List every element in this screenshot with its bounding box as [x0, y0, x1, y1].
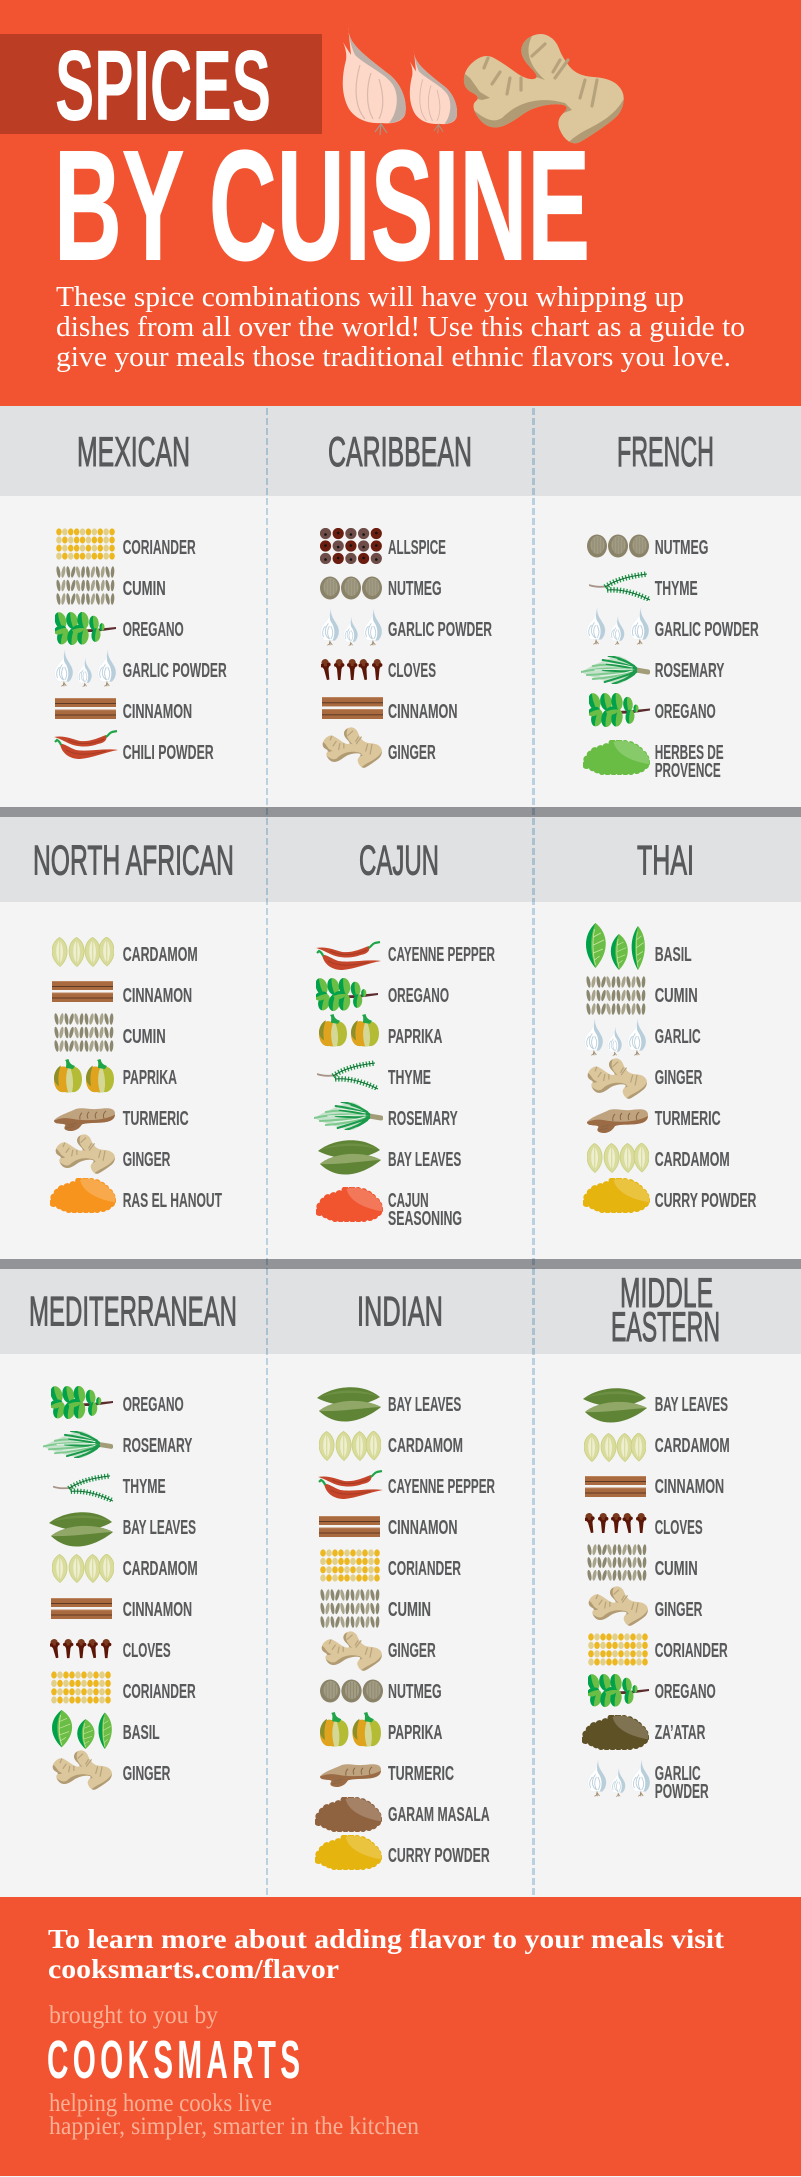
item: oregano [48, 1385, 184, 1420]
item: cardamom [584, 1433, 730, 1462]
item: cloves [319, 658, 436, 682]
item: cumin: CUMIN [655, 1558, 698, 1580]
item: cumin: CUMIN [123, 578, 166, 600]
item: nutmeg: NUTMEG [388, 578, 442, 600]
item: bay leaves [317, 1387, 461, 1422]
item: oregano: OREGANO [655, 1681, 716, 1703]
item: ginger [320, 1631, 436, 1673]
panel: indian [267, 1269, 534, 1870]
item: garlic powder: POWDER [655, 1781, 709, 1803]
item: bay leaves: BAY LEAVES [388, 1149, 461, 1171]
item: cayenne pepper [316, 942, 495, 970]
item: nutmeg [320, 576, 442, 600]
footer [0, 1897, 801, 2176]
item: ginger: GINGER [388, 1640, 436, 1662]
brought to you by: brought to you by [49, 2002, 218, 2029]
item: cumin [587, 1544, 698, 1581]
item: basil [52, 1710, 160, 1749]
item: cinnamon: CINNAMON [388, 1517, 458, 1539]
item: coriander: CORIANDER [655, 1640, 728, 1662]
item: ginger [54, 1134, 171, 1176]
item: turmeric [54, 1108, 189, 1131]
heading: mexican: MEXICAN [77, 428, 190, 475]
item: oregano: OREGANO [388, 985, 449, 1007]
item: curry powder: CURRY POWDER [388, 1845, 490, 1867]
call to action: To learn more about adding flavor to your meals visit [48, 1924, 724, 1954]
heading: caribbean [267, 406, 534, 496]
call to action [48, 1924, 724, 1984]
item: cinnamon [52, 981, 192, 1007]
call to action: cooksmarts.com/flavor [48, 1954, 339, 1984]
item: ginger [321, 727, 436, 770]
panel: mexican [0, 406, 267, 764]
title band [0, 34, 322, 134]
heading: indian [267, 1269, 534, 1354]
heading: thai: THAI [637, 836, 694, 884]
item: garlic powder [588, 1760, 709, 1803]
item: nutmeg [320, 1680, 442, 1703]
item: bay leaves: BAY LEAVES [388, 1394, 461, 1416]
item: cinnamon [585, 1476, 724, 1498]
item: herbes de provence: PROVENCE [655, 760, 721, 782]
item: bay leaves [49, 1512, 196, 1547]
item: cardamom: CARDAMOM [123, 1558, 198, 1580]
item: rosemary [43, 1431, 193, 1458]
heading: french: FRENCH [617, 428, 714, 475]
item: cinnamon: CINNAMON [655, 1476, 724, 1498]
heading: mediterranean [0, 1269, 267, 1354]
heading: french [534, 406, 801, 496]
item: coriander: CORIANDER [123, 1681, 196, 1703]
item: allspice [320, 528, 446, 564]
item: curry powder [582, 1177, 757, 1213]
heading: middle eastern [534, 1269, 801, 1354]
tagline: helping home cooks live [49, 2090, 272, 2117]
panel: mediterranean [0, 1269, 267, 1792]
item: cardamom: CARDAMOM [388, 1435, 463, 1457]
item: herbes de provence: HERBES DE [655, 742, 724, 764]
heading: caribbean: CARIBBEAN [328, 428, 472, 475]
item: cumin: CUMIN [655, 985, 698, 1007]
item: paprika: PAPRIKA [123, 1067, 177, 1089]
item: cinnamon [55, 698, 192, 723]
item: ginger [586, 1058, 703, 1101]
item: nutmeg: NUTMEG [388, 1681, 442, 1703]
item: basil: BASIL [655, 944, 692, 966]
panel: cajun [267, 817, 534, 1230]
item: curry powder [314, 1834, 490, 1870]
item: coriander: CORIANDER [123, 537, 196, 559]
item: turmeric: TURMERIC [123, 1108, 189, 1130]
item: paprika: PAPRIKA [388, 1026, 442, 1048]
item: cardamom [52, 1554, 198, 1583]
item: ginger [51, 1750, 171, 1792]
item: chili powder [54, 731, 214, 764]
heading: mediterranean: MEDITERRANEAN [29, 1288, 237, 1334]
item: nutmeg: NUTMEG [655, 537, 708, 559]
item: cumin: CUMIN [123, 1026, 166, 1048]
item: basil: BASIL [123, 1722, 160, 1744]
item: coriander: CORIANDER [388, 1558, 461, 1580]
intro text [56, 282, 745, 373]
item: cloves [48, 1638, 171, 1662]
item: rosemary [581, 656, 725, 684]
item: cardamom: CARDAMOM [123, 944, 198, 966]
item: coriander [56, 528, 196, 560]
item: ras el hanout [49, 1177, 222, 1213]
item: garlic powder: GARLIC POWDER [388, 619, 492, 641]
item: thyme [317, 1063, 431, 1089]
panel: caribbean [267, 406, 534, 770]
heading: north african: NORTH AFRICAN [33, 836, 234, 884]
icon: large garlic bulb [343, 27, 406, 135]
item: cumin [320, 1589, 431, 1628]
item: turmeric [320, 1763, 454, 1787]
item: coriander [51, 1671, 196, 1704]
item: thyme: THYME [655, 578, 698, 600]
tagline [49, 2090, 419, 2140]
item: cardamom [319, 1431, 463, 1460]
item: cardamom [52, 937, 198, 966]
item: cajun seasoning: SEASONING [388, 1208, 462, 1230]
item: ras el hanout: RAS EL HANOUT [123, 1190, 222, 1212]
item: bay leaves: BAY LEAVES [655, 1394, 728, 1416]
item: cloves: CLOVES [388, 660, 436, 682]
item: cinnamon: CINNAMON [123, 701, 192, 723]
item: oregano: OREGANO [123, 619, 184, 641]
item: ginger: GINGER [123, 1763, 171, 1785]
item: nutmeg [587, 534, 708, 559]
item: garlic powder [587, 608, 759, 645]
item: garlic powder: GARLIC [655, 1763, 701, 1785]
item: thyme: THYME [388, 1067, 431, 1089]
item: paprika [319, 1014, 442, 1048]
item: cloves: CLOVES [123, 1640, 171, 1662]
item: cloves: CLOVES [655, 1517, 703, 1539]
item: cumin [586, 976, 698, 1015]
item: cinnamon [51, 1598, 192, 1621]
item: cumin [54, 1013, 166, 1052]
item: thyme [589, 574, 698, 600]
tagline: happier, simpler, smarter in the kitchen [49, 2113, 419, 2140]
item: garlic powder [55, 650, 227, 687]
item: rosemary: ROSEMARY [388, 1108, 458, 1130]
heading: indian: INDIAN [357, 1288, 443, 1334]
item: rosemary: ROSEMARY [123, 1435, 193, 1457]
heading: cajun [267, 817, 534, 902]
item: cinnamon: CINNAMON [388, 701, 458, 723]
item: bay leaves [583, 1388, 728, 1423]
item: cloves [583, 1512, 703, 1539]
item: garlic [585, 1019, 701, 1056]
item: thyme [53, 1476, 166, 1501]
item: cayenne pepper: CAYENNE PEPPER [388, 1476, 495, 1498]
item: allspice: ALLSPICE [388, 537, 446, 559]
heading: mexican [0, 406, 267, 496]
item: herbes de provence [582, 739, 724, 782]
item: paprika [320, 1712, 442, 1746]
heading: thai [534, 817, 801, 902]
icon: small garlic bulb [410, 50, 457, 133]
item: garlic: GARLIC [655, 1026, 701, 1048]
item: rosemary [314, 1102, 458, 1130]
item: cumin [56, 566, 166, 605]
item: garam masala [314, 1796, 490, 1832]
item: ginger: GINGER [388, 742, 436, 764]
item: coriander [320, 1549, 461, 1582]
item: bay leaves [318, 1140, 461, 1175]
title: spices: SPICES [55, 30, 271, 142]
item: za'atar: ZA’ATAR [655, 1722, 706, 1744]
item: oregano [586, 1673, 716, 1708]
item: cumin: CUMIN [388, 1599, 431, 1621]
item: cinnamon: CINNAMON [123, 985, 192, 1007]
item: bay leaves: BAY LEAVES [123, 1517, 196, 1539]
item: thyme: THYME [123, 1476, 166, 1498]
panel: french [534, 406, 801, 782]
intro text: These spice combinations will have you whipping up [56, 282, 684, 313]
item: oregano: OREGANO [655, 701, 716, 723]
item: garlic powder [321, 609, 492, 646]
panel: middle eastern [534, 1269, 801, 1803]
header [0, 0, 801, 406]
item: chili powder: CHILI POWDER [123, 742, 214, 764]
item: cajun seasoning: CAJUN [388, 1190, 429, 1212]
item: cajun seasoning [315, 1186, 462, 1230]
item: turmeric: TURMERIC [655, 1108, 721, 1130]
item: ginger: GINGER [123, 1149, 171, 1171]
item: ginger: GINGER [655, 1067, 703, 1089]
item: za'atar [581, 1714, 706, 1750]
item: cinnamon [319, 1516, 458, 1539]
item: cardamom: CARDAMOM [655, 1149, 730, 1171]
panel: north african [0, 817, 267, 1213]
item: turmeric: TURMERIC [388, 1763, 454, 1785]
heading: middle eastern: MIDDLE [620, 1269, 713, 1316]
item: oregano [587, 692, 716, 728]
item: basil [586, 923, 692, 970]
intro text: dishes from all over the world! Use this chart as a guide to [56, 312, 745, 343]
icon: large ginger root [460, 34, 630, 150]
item: garlic powder: GARLIC POWDER [123, 660, 227, 682]
item: cardamom: CARDAMOM [655, 1435, 730, 1457]
item: cayenne pepper: CAYENNE PEPPER [388, 944, 495, 966]
item: cardamom [587, 1143, 730, 1172]
item: ginger [587, 1586, 703, 1628]
item: paprika: PAPRIKA [388, 1722, 442, 1744]
item: cayenne pepper [318, 1471, 495, 1499]
panel: thai [534, 817, 801, 1213]
heading: north african [0, 817, 267, 902]
item: coriander [588, 1633, 728, 1666]
item: paprika [54, 1059, 177, 1092]
item: garam masala: GARAM MASALA [388, 1804, 490, 1826]
heading: cajun: CAJUN [359, 836, 439, 884]
item: turmeric [587, 1108, 721, 1133]
item: oregano [53, 611, 184, 646]
logo: cooksmarts: COOKSMARTS [47, 2031, 304, 2090]
item: cinnamon [322, 697, 458, 723]
intro text: give your meals those traditional ethnic flavors you love. [56, 342, 731, 373]
item: rosemary: ROSEMARY [655, 660, 725, 682]
item: ginger: GINGER [655, 1599, 703, 1621]
item: oregano [313, 977, 449, 1012]
item: oregano: OREGANO [123, 1394, 184, 1416]
item: cinnamon: CINNAMON [123, 1599, 192, 1621]
